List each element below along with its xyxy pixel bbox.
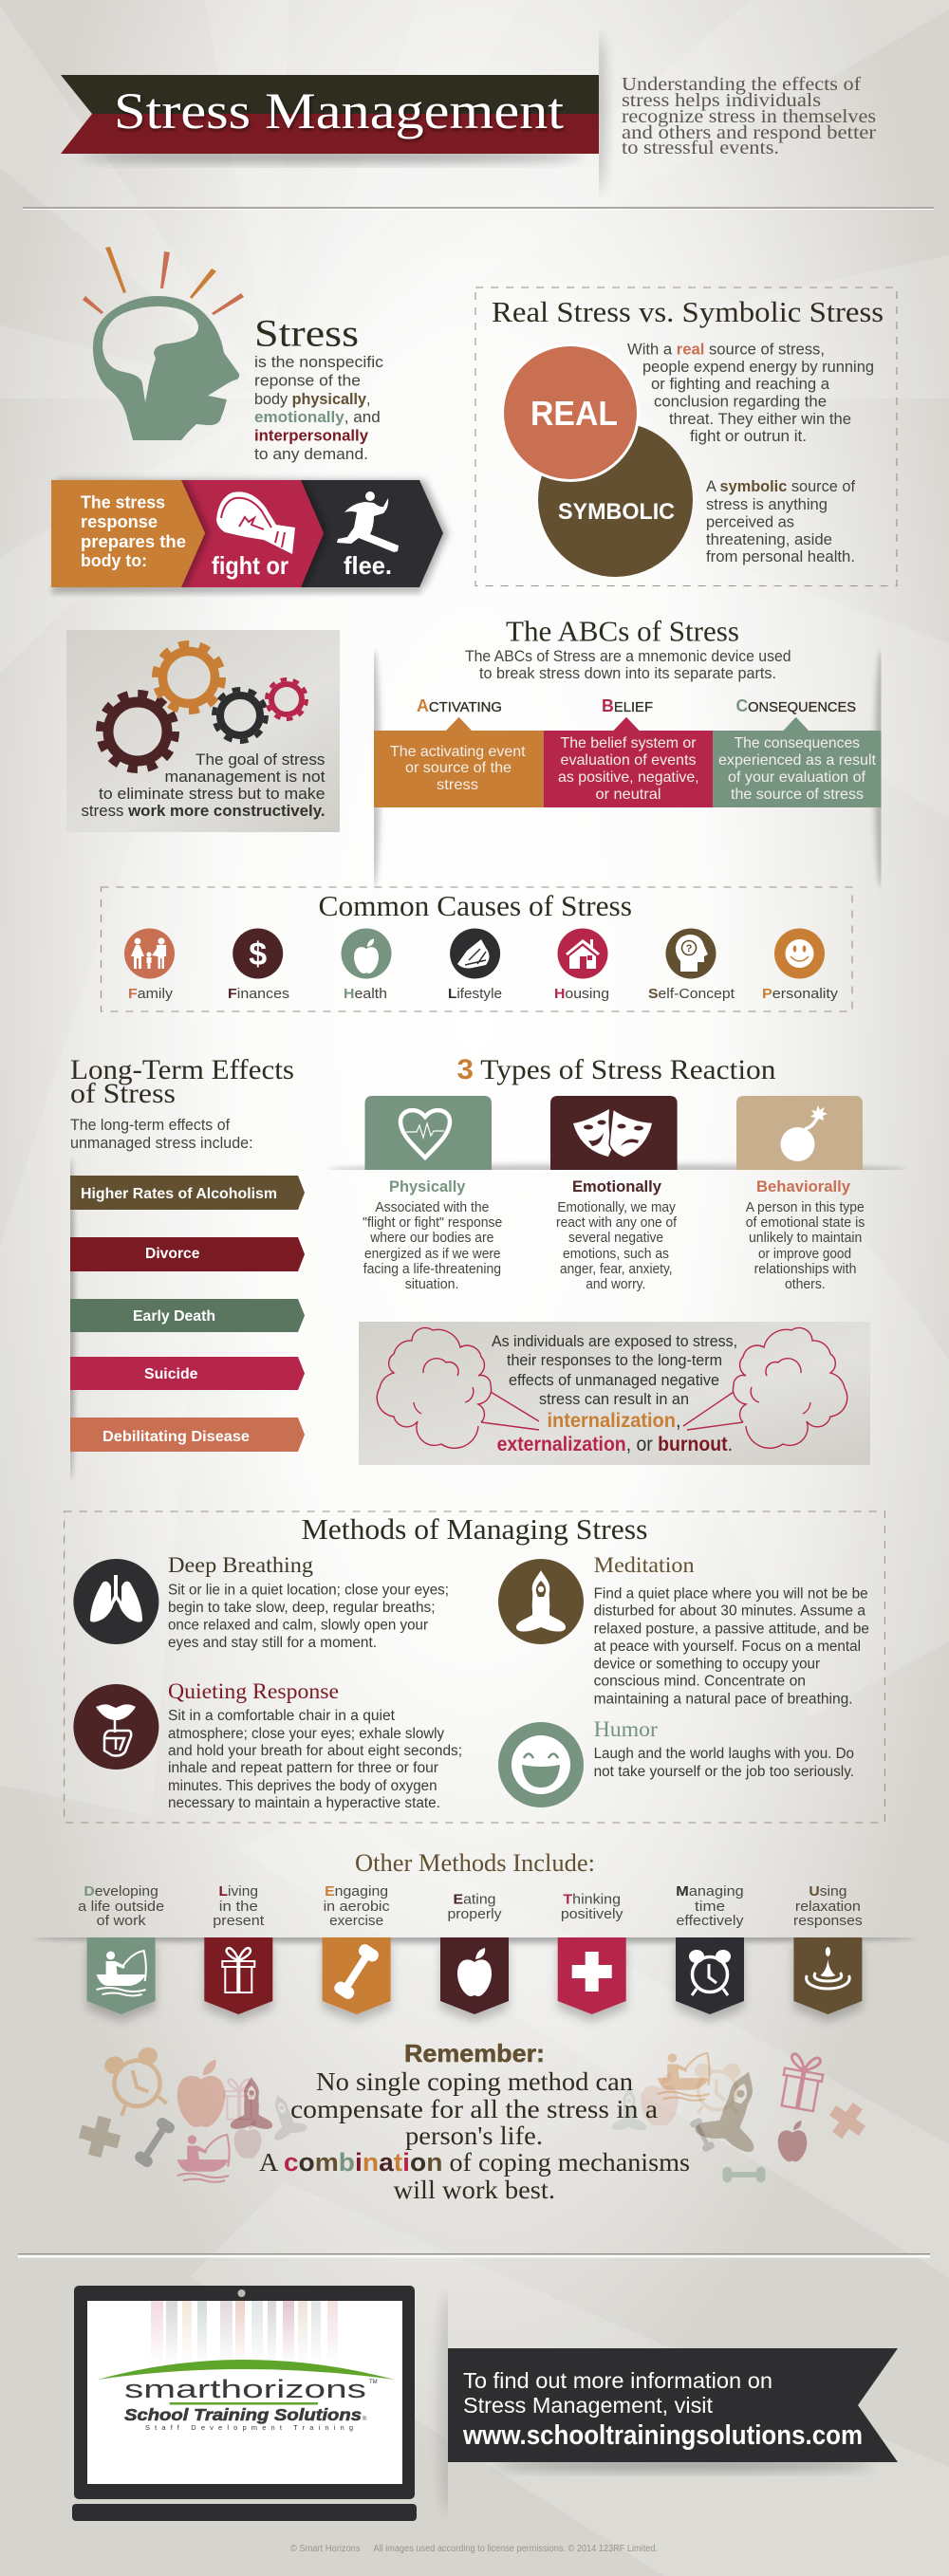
banner: thinking positively: Thinking bbox=[563, 1893, 621, 1908]
remember message: will work best. bbox=[393, 2176, 555, 2204]
ribbon: divorce bbox=[70, 1237, 305, 1271]
banner: aerobic exercise bbox=[323, 1884, 391, 2014]
heading: other methods: Other Methods Include: bbox=[355, 1849, 595, 1877]
belief column: or neutral bbox=[596, 787, 661, 803]
icon: running figure bbox=[337, 491, 399, 552]
ribbon: divorce: Divorce bbox=[145, 1246, 200, 1262]
ribbon: early death bbox=[70, 1299, 305, 1332]
goal text: mananagement is not bbox=[165, 768, 326, 786]
belief column: as positive, negative, bbox=[558, 769, 699, 786]
panel: methods of managing stress bbox=[65, 1511, 884, 1823]
card: emotionally: and worry. bbox=[586, 1277, 645, 1292]
card: emotionally: anger, fear, anxiety, bbox=[560, 1262, 673, 1277]
method: quieting response: Quieting Response bbox=[168, 1679, 339, 1703]
method: meditation: at peace with yourself. Focus on a mental bbox=[594, 1639, 861, 1655]
remember message: Remember: bbox=[404, 2039, 545, 2067]
stress definition bbox=[254, 311, 384, 463]
goal text: stress work more constructively. bbox=[82, 802, 325, 820]
stress definition: emotionally, and bbox=[254, 408, 381, 426]
heading: ABCs: The ABCs of Stress bbox=[506, 615, 739, 648]
banner: relaxation responses bbox=[793, 1884, 863, 2014]
real circle bbox=[501, 343, 640, 482]
belief column: BELIEF bbox=[602, 696, 653, 715]
real stress text: conclusion regarding the bbox=[654, 393, 827, 410]
card: behaviorally: Behaviorally bbox=[756, 1177, 851, 1195]
banner: life outside of work: Developing bbox=[84, 1884, 158, 1900]
logo: School Training Solutions bbox=[124, 2405, 362, 2424]
method: quieting response: necessary to maintain a hyperactive state. bbox=[168, 1795, 440, 1811]
real stress text bbox=[627, 342, 874, 445]
cause: finances bbox=[228, 928, 289, 1002]
card: physically: "flight or fight" response bbox=[363, 1215, 502, 1231]
intro text: and others and respond better bbox=[622, 122, 876, 143]
card: behaviorally: relationships with bbox=[754, 1262, 856, 1277]
card: behaviorally: or improve good bbox=[758, 1247, 851, 1262]
callout: internalization panel bbox=[359, 1322, 870, 1465]
banner: thinking positively: positively bbox=[561, 1907, 623, 1922]
method: deep breathing: Deep Breathing bbox=[168, 1553, 314, 1577]
callout text: internalization, bbox=[547, 1410, 681, 1432]
activating column: ACTIVATING bbox=[417, 696, 502, 715]
card: emotionally bbox=[550, 1096, 678, 1292]
remember message: A combination of coping mechanisms bbox=[259, 2148, 690, 2177]
cause: family bbox=[124, 928, 175, 1002]
card: behaviorally: of emotional state is bbox=[746, 1215, 865, 1231]
symbolic stress text bbox=[706, 478, 855, 565]
method: deep breathing bbox=[73, 1553, 449, 1651]
method: meditation: Find a quiet place where you will not be be bbox=[594, 1585, 868, 1602]
stress definition: to any demand. bbox=[254, 445, 368, 463]
heading: methods: Methods of Managing Stress bbox=[302, 1512, 647, 1546]
method: humor: not take yourself or the job too seriously. bbox=[594, 1764, 854, 1780]
logo: TM bbox=[369, 2380, 378, 2385]
consequences column: experienced as a result bbox=[718, 752, 877, 769]
cause: health bbox=[342, 928, 391, 1002]
method: quieting response: Sit in a comfortable chair in a quiet bbox=[168, 1708, 396, 1724]
panel: real vs symbolic stress bbox=[475, 287, 897, 586]
real stress text: fight or outrun it. bbox=[690, 428, 807, 445]
ribbon: disease: Debilitating Disease bbox=[102, 1429, 250, 1445]
banner: living in the present: Living bbox=[219, 1884, 258, 1900]
method: quieting response: and hold your breath for about eight seconds; bbox=[168, 1743, 462, 1759]
card: physically: where our bodies are bbox=[369, 1231, 493, 1246]
method: deep breathing: eyes and stay still for a moment. bbox=[168, 1635, 377, 1651]
stress definition: body physically, bbox=[254, 390, 370, 408]
method: meditation: device or something to occupy your bbox=[594, 1656, 820, 1672]
effects intro: unmanaged stress include: bbox=[70, 1134, 253, 1152]
symbolic stress text: stress is anything bbox=[706, 496, 828, 513]
card: emotionally: emotions, such as bbox=[563, 1247, 669, 1262]
title ribbon bbox=[61, 33, 606, 195]
remember message: compensate for all the stress in a bbox=[290, 2095, 658, 2123]
call to action ribbon: To find out more information on bbox=[463, 2368, 772, 2393]
banner: life outside of work: of work bbox=[97, 1914, 146, 1929]
icon: boxing glove bbox=[216, 491, 295, 554]
fight or flee arrow chart: flee. bbox=[344, 551, 392, 580]
banner: eating properly bbox=[440, 1893, 509, 2014]
belief column bbox=[544, 696, 713, 807]
method: humor: Laugh and the world laughs with you. Do bbox=[594, 1746, 854, 1762]
real stress text: With a real source of stress, bbox=[627, 342, 825, 359]
panel: common causes of stress bbox=[101, 887, 852, 1011]
activating column bbox=[374, 696, 544, 807]
callout text: effects of unmanaged negative bbox=[509, 1371, 719, 1389]
fight or flee arrow chart: The stress bbox=[81, 493, 165, 512]
intro text: to stressful events. bbox=[622, 138, 779, 158]
activating column: or source of the bbox=[405, 760, 512, 776]
section: three types of stress reaction bbox=[327, 1054, 906, 1292]
symbolic stress text: A symbolic source of bbox=[706, 478, 855, 495]
intro text bbox=[622, 74, 876, 158]
activating column: The activating event bbox=[390, 744, 526, 760]
title ribbon: Stress Management bbox=[114, 83, 564, 139]
section: ABCs of stress bbox=[367, 615, 888, 887]
banner: living in the present bbox=[204, 1884, 272, 2014]
cause: self-concept: ? bbox=[686, 943, 693, 954]
method: quieting response bbox=[73, 1679, 462, 1811]
symbolic stress text: perceived as bbox=[706, 514, 794, 531]
symbolic stress text: threatening, aside bbox=[706, 531, 832, 548]
method: meditation: relaxed posture, a passive attitude, and be bbox=[594, 1621, 869, 1637]
consequences column: The consequences bbox=[735, 735, 860, 751]
ribbon: alcoholism: Higher Rates of Alcoholism bbox=[81, 1186, 277, 1202]
ribbon: early death: Early Death bbox=[133, 1308, 215, 1325]
cause: self-concept bbox=[648, 928, 735, 1002]
logo: ® bbox=[363, 2416, 367, 2422]
stress definition: is the nonspecific bbox=[254, 353, 384, 371]
call to action ribbon bbox=[438, 2291, 898, 2515]
cause: finances: $ bbox=[249, 936, 267, 973]
heading: long-term effects: Long-Term Effects bbox=[70, 1054, 294, 1085]
belief column: evaluation of events bbox=[560, 752, 697, 769]
method: quieting response: minutes. This deprives the body of oxygen bbox=[168, 1778, 437, 1794]
logo: Staff Development Training bbox=[145, 2423, 353, 2432]
method: meditation: disturbed for about 30 minutes. Assume a bbox=[594, 1603, 865, 1620]
banner: managing time: time bbox=[695, 1900, 725, 1915]
callout text: stress can result in an bbox=[539, 1390, 689, 1408]
cause: self-concept: Self-Concept bbox=[648, 986, 735, 1002]
icon: left cloud bbox=[377, 1327, 539, 1448]
stress definition: Stress bbox=[254, 311, 359, 355]
intro text: recognize stress in themselves bbox=[622, 106, 876, 127]
heading: real vs symbolic: Real Stress vs. Symbolic Stress bbox=[492, 295, 884, 328]
cause: family: Family bbox=[128, 986, 174, 1002]
icon: right cloud bbox=[683, 1327, 847, 1448]
method: meditation: maintaining a natural pace of breathing. bbox=[594, 1691, 853, 1707]
banner: eating properly: Eating bbox=[454, 1893, 495, 1908]
card: emotionally: Emotionally bbox=[572, 1177, 662, 1195]
footer credits: All images used according to license permissions. © 2014 123RF Limited. bbox=[374, 2544, 658, 2554]
stress definition: interpersonally bbox=[254, 427, 369, 444]
method: deep breathing: once relaxed and calm, slowly open your bbox=[168, 1617, 428, 1633]
goal text: The goal of stress bbox=[195, 751, 325, 769]
callout text: their responses to the long-term bbox=[507, 1351, 722, 1369]
banner: managing time: effectively bbox=[676, 1914, 744, 1929]
card: physically: energized as if we were bbox=[364, 1247, 501, 1262]
method: humor: Humor bbox=[594, 1717, 658, 1741]
cause: finances: Finances bbox=[228, 986, 289, 1002]
other methods banners bbox=[33, 1884, 916, 2014]
goal text bbox=[82, 751, 326, 820]
goal text: to eliminate stress but to make bbox=[99, 785, 325, 803]
icon: stressed head bbox=[83, 247, 244, 440]
real stress text: or fighting and reaching a bbox=[651, 376, 830, 393]
callout text: As individuals are exposed to stress, bbox=[492, 1332, 737, 1350]
card: behaviorally: unlikely to maintain bbox=[749, 1231, 862, 1246]
card: physically: Physically bbox=[389, 1177, 466, 1195]
panel: goal of stress management bbox=[66, 630, 340, 832]
heading: 3 types: 3 Types of Stress Reaction bbox=[457, 1054, 776, 1085]
banner: aerobic exercise: in aerobic bbox=[324, 1900, 390, 1915]
consequences column bbox=[713, 696, 881, 807]
card: behaviorally: A person in this type bbox=[746, 1200, 865, 1215]
cause: housing: Housing bbox=[554, 986, 609, 1002]
cause: health: Health bbox=[344, 986, 387, 1002]
callout text: externalization, or burnout. bbox=[497, 1434, 733, 1455]
intro text: Understanding the effects of bbox=[622, 74, 861, 95]
fight or flee arrow chart: response bbox=[81, 512, 158, 531]
consequences column: CONSEQUENCES bbox=[736, 696, 856, 715]
cause: lifestyle: Lifestyle bbox=[448, 986, 502, 1002]
icon: gears bbox=[100, 643, 307, 769]
method: deep breathing: Sit or lie in a quiet location; close your eyes; bbox=[168, 1583, 449, 1599]
banner: managing time bbox=[676, 1884, 744, 2014]
method: meditation bbox=[498, 1553, 869, 1707]
intro text: stress helps individuals bbox=[622, 90, 821, 111]
card: behaviorally: others. bbox=[785, 1277, 826, 1292]
ABCs intro: to break stress down into its separate parts. bbox=[479, 665, 776, 682]
symbolic stress text: from personal health. bbox=[706, 548, 855, 565]
real circle: REAL bbox=[530, 394, 618, 433]
fight or flee arrow chart: prepares the bbox=[81, 532, 186, 551]
method: meditation: conscious mind. Concentrate on bbox=[594, 1674, 806, 1690]
remember message bbox=[259, 2039, 690, 2204]
ABCs intro bbox=[465, 648, 791, 682]
card: physically: facing a life-threatening bbox=[363, 1262, 501, 1277]
cause: housing bbox=[554, 928, 609, 1002]
banner: relaxation responses: responses bbox=[793, 1914, 863, 1929]
symbolic circle bbox=[538, 422, 693, 577]
card: physically: situation. bbox=[405, 1277, 459, 1292]
banner: life outside of work bbox=[78, 1884, 164, 2014]
fight or flee arrow chart: fight or bbox=[212, 551, 288, 580]
card: physically bbox=[363, 1096, 502, 1292]
symbolic circle: SYMBOLIC bbox=[558, 499, 675, 525]
heading: common causes: Common Causes of Stress bbox=[319, 889, 632, 922]
call to action ribbon: Stress Management, visit bbox=[463, 2393, 714, 2418]
banner: thinking positively bbox=[558, 1893, 626, 2014]
method: meditation: Meditation bbox=[594, 1553, 695, 1577]
faded icon collage bbox=[75, 2046, 872, 2202]
real stress text: people expend energy by running bbox=[642, 359, 874, 376]
banner: living in the present: present bbox=[213, 1914, 264, 1929]
banner: aerobic exercise: Engaging bbox=[325, 1884, 388, 1900]
card: physically: Associated with the bbox=[375, 1200, 489, 1215]
section: long-term effects bbox=[65, 1054, 305, 1480]
logo bbox=[98, 2301, 395, 2432]
banner: managing time: Managing bbox=[676, 1884, 744, 1900]
cause: personality bbox=[762, 928, 839, 1002]
real stress text: threat. They either win the bbox=[669, 411, 851, 428]
ribbon: alcoholism bbox=[70, 1176, 305, 1210]
consequences column: the source of stress bbox=[731, 787, 864, 803]
remember message: No single coping method can bbox=[316, 2067, 634, 2096]
fight or flee arrow chart: body to: bbox=[81, 551, 147, 570]
ribbon: suicide bbox=[70, 1357, 305, 1390]
footer credits: © Smart Horizons bbox=[290, 2544, 361, 2554]
method: deep breathing: begin to take slow, deep, regular breaths; bbox=[168, 1600, 435, 1616]
method: humor bbox=[498, 1717, 854, 1807]
method: quieting response: inhale and repeat pattern for three or four bbox=[168, 1760, 438, 1776]
fight or flee arrow chart bbox=[51, 480, 443, 594]
card: emotionally: react with any one of bbox=[556, 1215, 678, 1231]
card: emotionally: several negative bbox=[568, 1231, 663, 1246]
banner: living in the present: in the bbox=[219, 1900, 258, 1915]
banner: life outside of work: a life outside bbox=[78, 1900, 164, 1915]
heading: long-term effects: of Stress bbox=[70, 1078, 176, 1109]
ribbon: suicide: Suicide bbox=[144, 1366, 198, 1382]
cause: lifestyle bbox=[448, 928, 502, 1002]
cause: personality: Personality bbox=[762, 986, 839, 1002]
card: emotionally: Emotionally, we may bbox=[557, 1200, 677, 1215]
banner: relaxation responses: Using bbox=[809, 1884, 847, 1900]
heading: long-term effects bbox=[70, 1054, 294, 1109]
effects intro bbox=[70, 1116, 253, 1152]
banner: aerobic exercise: exercise bbox=[329, 1914, 383, 1929]
effects intro: The long-term effects of bbox=[70, 1116, 230, 1134]
consequences column: of your evaluation of bbox=[728, 769, 866, 786]
activating column: stress bbox=[437, 777, 478, 793]
logo: smarthorizons bbox=[124, 2375, 366, 2403]
laptop with logo bbox=[72, 2286, 417, 2521]
remember message: person's life. bbox=[405, 2122, 543, 2150]
call to action ribbon: www.schooltrainingsolutions.com bbox=[462, 2420, 863, 2451]
method: quieting response: atmosphere; close your eyes; exhale slowly bbox=[168, 1726, 444, 1742]
ABCs intro: The ABCs of Stress are a mnemonic device used bbox=[465, 648, 791, 665]
stress definition: reponse of the bbox=[254, 372, 361, 389]
callout text bbox=[492, 1332, 737, 1455]
banner: eating properly: properly bbox=[448, 1907, 502, 1922]
ribbon: disease bbox=[70, 1418, 305, 1452]
card: behaviorally bbox=[736, 1096, 865, 1292]
belief column: The belief system or bbox=[560, 735, 697, 751]
banner: relaxation responses: relaxation bbox=[795, 1900, 861, 1915]
